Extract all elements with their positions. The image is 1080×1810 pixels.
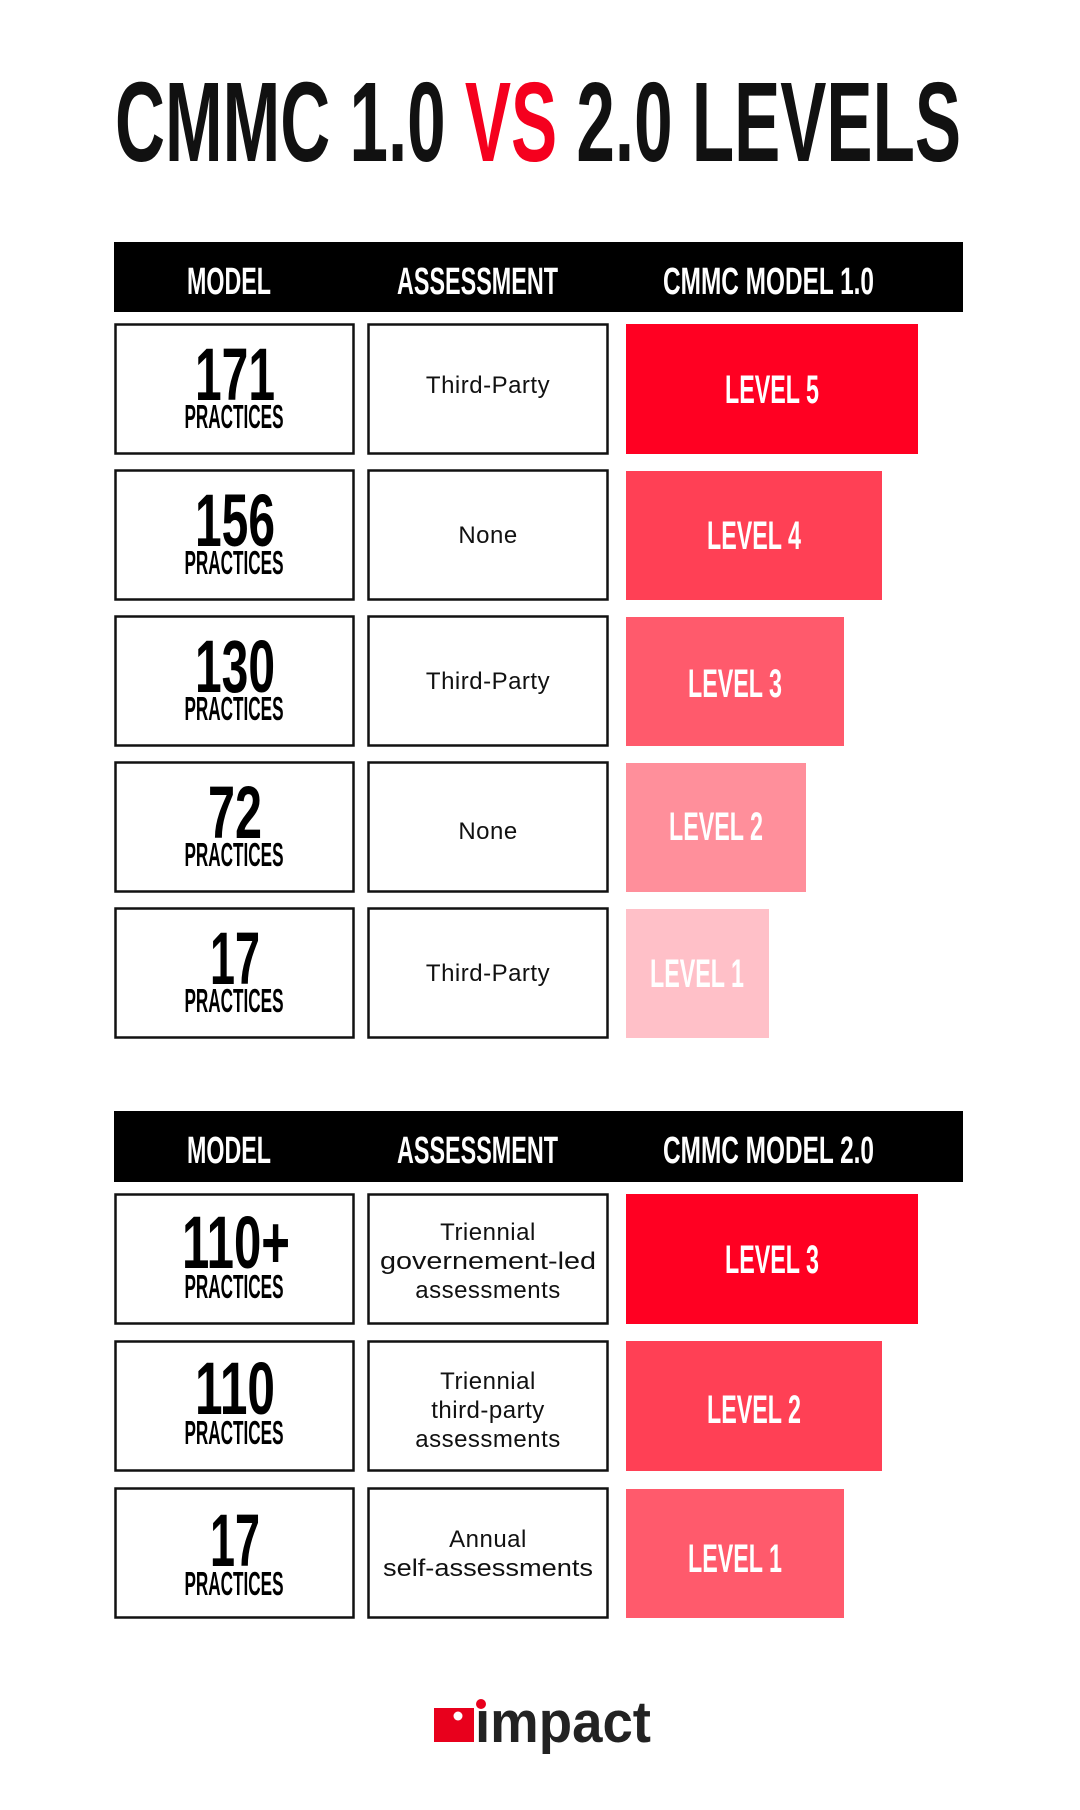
row 2.0: level 3: LEVEL 3 — [725, 1238, 819, 1282]
row 2.0: level 2: assessments — [415, 1426, 561, 1453]
header: table 1: ASSESSMENT — [397, 261, 558, 303]
row 2.0: level 3 — [116, 1194, 918, 1324]
row 2.0: level 1: 17 — [210, 1499, 260, 1582]
row: level 3: Third-Party — [426, 668, 550, 695]
row: level 1 — [116, 908, 769, 1038]
row 2.0: level 1 — [116, 1488, 844, 1618]
row: level 5: 171 — [195, 333, 275, 416]
row 2.0: level 3: governement-led — [380, 1248, 596, 1275]
row: level 2: 72 — [208, 771, 262, 854]
logo: impact: ımpact — [475, 1690, 651, 1755]
row 2.0: level 2: LEVEL 2 — [707, 1388, 801, 1432]
row 2.0: level 3: assessments — [415, 1277, 561, 1304]
row 2.0: level 2: PRACTICES — [184, 1414, 284, 1451]
header: table 1 — [114, 242, 963, 312]
row: level 5: LEVEL 5 — [725, 368, 819, 412]
row: level 5: PRACTICES — [184, 398, 284, 435]
row: level 3: 130 — [195, 625, 275, 708]
row 2.0: level 1: LEVEL 1 — [688, 1537, 782, 1581]
row: level 1: 17 — [210, 917, 260, 1000]
row: level 4 — [116, 470, 882, 600]
row: level 1: PRACTICES — [184, 982, 284, 1019]
row 2.0: level 3: PRACTICES — [184, 1268, 284, 1305]
row: level 4: None — [458, 522, 518, 549]
row 2.0: level 2: third-party — [431, 1397, 545, 1424]
row: level 2: None — [458, 818, 518, 845]
row: level 2: PRACTICES — [184, 836, 284, 873]
row 2.0: level 2: Triennial — [440, 1368, 536, 1395]
row: level 3 — [116, 616, 844, 746]
row 2.0: level 1: self-assessments — [383, 1555, 593, 1582]
row 2.0: level 1: Annual — [449, 1526, 527, 1553]
row: level 2 — [116, 762, 806, 892]
row 2.0: level 3: Triennial — [440, 1219, 536, 1246]
row: level 5 — [116, 324, 918, 454]
row: level 4: 156 — [195, 479, 275, 562]
header: table 2 — [114, 1111, 963, 1182]
row: level 3: LEVEL 3 — [688, 662, 782, 706]
row 2.0: level 1: PRACTICES — [184, 1565, 284, 1602]
header: table 2: CMMC MODEL 2.0 — [663, 1130, 874, 1172]
row 2.0: level 3: 110+ — [182, 1201, 290, 1284]
row: level 5: Third-Party — [426, 372, 550, 399]
header: table 2: ASSESSMENT — [397, 1130, 558, 1172]
row: level 1: LEVEL 1 — [650, 952, 744, 996]
row 2.0: level 2 — [116, 1341, 882, 1471]
header: table 1: CMMC MODEL 1.0 — [663, 261, 874, 303]
row: level 2: LEVEL 2 — [669, 805, 763, 849]
row: level 3: PRACTICES — [184, 690, 284, 727]
row: level 4: PRACTICES — [184, 544, 284, 581]
header: table 1: MODEL — [187, 261, 271, 303]
row: level 4: LEVEL 4 — [707, 514, 801, 558]
row: level 1: Third-Party — [426, 960, 550, 987]
row 2.0: level 2: 110 — [195, 1347, 275, 1430]
header: table 2: MODEL — [187, 1130, 271, 1172]
